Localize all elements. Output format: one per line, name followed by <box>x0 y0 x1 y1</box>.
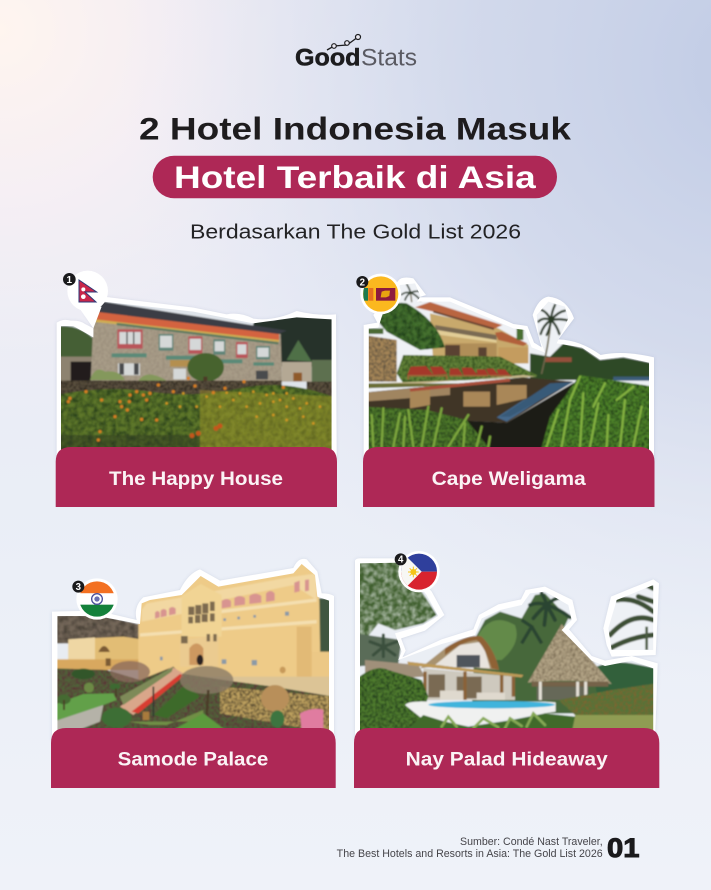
logo: GoodStats: Good <box>295 45 360 72</box>
logo: GoodStats <box>295 34 417 72</box>
panel: The Happy House <box>56 271 337 507</box>
icon: palm trees <box>402 284 568 373</box>
photo cutout: Cape Weligama <box>363 277 654 460</box>
flag: Sri Lanka: 2 <box>360 277 365 288</box>
title line 2 pill <box>153 156 557 198</box>
title line 1: 2 Hotel Indonesia Masuk <box>139 110 572 146</box>
panel: Nay Palad Hideaway <box>354 550 659 788</box>
panel: Samode Palace <box>51 559 336 788</box>
panel: Cape Weligama <box>356 274 654 507</box>
logo: GoodStats: Stats <box>361 45 417 72</box>
flag: India: 3 <box>76 582 82 593</box>
flag: Sri Lanka <box>356 274 401 314</box>
photo cutout: The Happy House <box>57 297 337 460</box>
photo cutout: Samode Palace <box>52 559 334 740</box>
flag: Philippines: 4 <box>398 555 404 566</box>
source note: The Best Hotels and Resorts in Asia: The Gold List 2026 <box>337 848 603 860</box>
name bar: Samode Palace: Samode Palace <box>118 749 268 771</box>
page number: 01 <box>607 833 640 863</box>
flag: Nepal: 1 <box>67 275 73 286</box>
flag: Nepal <box>63 271 108 328</box>
name bar: Nay Palad Hideaway: Nay Palad Hideaway <box>406 749 608 771</box>
flag: India <box>72 578 118 620</box>
flag: Philippines <box>395 550 440 593</box>
name bar: Cape Weligama: Cape Weligama <box>432 468 587 490</box>
name bar: Samode Palace <box>51 728 336 788</box>
name bar: The Happy House <box>56 447 337 507</box>
source note <box>337 836 603 860</box>
photo cutout: Nay Palad Hideaway <box>355 557 659 740</box>
subtitle: Berdasarkan The Gold List 2026 <box>190 220 521 243</box>
name bar: The Happy House: The Happy House <box>109 468 283 490</box>
source note: Sumber: Condé Nast Traveler, <box>460 836 603 848</box>
name bar: Nay Palad Hideaway <box>354 728 659 788</box>
name bar: Cape Weligama <box>363 447 654 507</box>
title line 2 pill: Hotel Terbaik di Asia <box>174 159 536 195</box>
